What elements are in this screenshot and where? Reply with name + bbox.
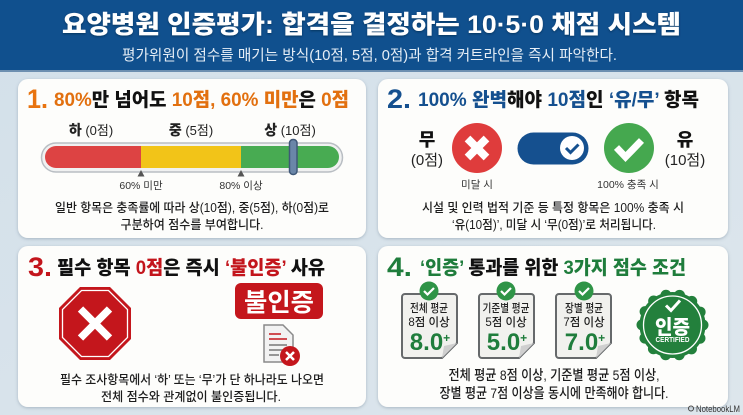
panel 4 heading: 4. — [387, 252, 412, 282]
icon: green check circle — [604, 123, 654, 173]
card: overall average: 8점 이상 — [408, 316, 450, 329]
subtitle: 평가위원이 점수를 매기는 방식(10점, 5점, 0점)과 합격 커트라인을 즉시 파악한다. — [122, 47, 617, 64]
header banner — [0, 0, 743, 72]
panel 3 heading — [28, 252, 325, 282]
certified seal — [640, 292, 706, 358]
title: 요양병원 인증평가: 합격을 결정하는 10·5·0 채점 시스템 — [62, 11, 681, 39]
certified seal: CERTIFIED — [656, 337, 690, 344]
label: yes — [665, 130, 705, 169]
card: per-criterion average: 5.0 — [487, 329, 520, 356]
panel 1 description: 구분하여 점수를 부여합니다. — [120, 217, 264, 232]
label: none — [411, 130, 443, 169]
threshold markers: 80% 이상 — [219, 180, 263, 192]
level labels: 하 (0점) — [69, 122, 113, 138]
card: per-chapter average: 7점 이상 — [563, 316, 605, 329]
panel 4: certification conditions — [378, 246, 728, 407]
card: per-chapter average — [556, 282, 611, 358]
icon: toggle switch — [518, 132, 588, 164]
panel 2 description — [422, 201, 684, 232]
toggle captions — [461, 179, 659, 191]
panel 4 heading: ‘인증’ 통과를 위한 3가지 점수 조건 — [420, 257, 686, 279]
panel 1 description: 일반 항목은 충족률에 따라 상(10점), 중(5점), 하(0점)로 — [55, 201, 329, 215]
card: per-criterion average: 기준별 평균 — [482, 302, 530, 315]
badge: non-certified: 불인증 — [244, 289, 314, 317]
score gauge bar — [42, 140, 342, 174]
panel 4 description: 전체 평균 8점 이상, 기준별 평균 5점 이상, — [448, 367, 660, 383]
card: per-chapter average: 장별 평균 — [565, 302, 603, 315]
panel 1 heading: 80%만 넘어도 10점, 60% 미만은 0점 — [54, 89, 349, 111]
panel 1 heading — [27, 84, 349, 114]
certified seal: 인증 — [655, 316, 690, 339]
icon: rejected document — [264, 325, 300, 366]
card: per-criterion average: + — [520, 331, 527, 345]
toggle captions: 100% 충족 시 — [597, 179, 659, 191]
panel 2: pass/fail items — [378, 79, 728, 238]
card: overall average: 전체 평균 — [410, 302, 448, 315]
toggle captions: 미달 시 — [461, 179, 493, 191]
icon: red X circle — [452, 123, 502, 173]
panel 2 description: ‘유(10점)’, 미달 시 ‘무(0점)’로 처리됩니다. — [452, 218, 656, 232]
panel 3 description — [60, 373, 324, 404]
panel 3 heading: 3. — [28, 252, 52, 282]
card: overall average — [402, 282, 457, 358]
panel 3 description: 필수 조사항목에서 ‘하’ 또는 ‘무’가 단 하나라도 나오면 — [60, 373, 324, 387]
panel 2 heading — [387, 84, 699, 114]
card: per-criterion average — [479, 282, 534, 358]
level labels: 상 (10점) — [264, 122, 316, 138]
panel 4 description: 장별 평균 7점 이상을 동시에 만족해야 합니다. — [440, 385, 668, 401]
card: overall average: + — [443, 331, 450, 345]
panel 1 heading: 1. — [27, 84, 48, 114]
card: per-chapter average: + — [598, 331, 605, 345]
panel 4 description — [440, 367, 668, 401]
panel 3 description: 전체 점수와 관계없이 불인증됩니다. — [101, 390, 281, 404]
icon: stop octagon — [59, 287, 131, 360]
level labels — [69, 122, 316, 138]
threshold markers — [119, 170, 263, 192]
label: yes: 유 — [677, 130, 693, 150]
panel 2 heading: 100% 완벽해야 10점인 ‘유/무’ 항목 — [418, 89, 699, 111]
card: overall average: 8.0 — [410, 329, 443, 356]
panel 3 heading: 필수 항목 0점은 즉시 ‘불인증’ 사유 — [57, 257, 325, 279]
threshold markers: 60% 미만 — [119, 180, 163, 192]
level labels: 중 (5점) — [169, 122, 213, 138]
label: none: 무 — [419, 130, 435, 150]
panel 4 heading — [387, 252, 686, 282]
card: per-chapter average: 7.0 — [565, 329, 598, 356]
panel 2 description: 시설 및 인력 법적 기준 등 특정 항목은 100% 충족 시 — [422, 201, 684, 215]
panel 1 description — [55, 201, 329, 232]
label: yes: (10점) — [665, 152, 705, 169]
panel 2 heading: 2. — [387, 84, 411, 114]
panel 3: mandatory items — [18, 246, 366, 407]
panel 1: general scoring — [18, 79, 366, 238]
card: per-criterion average: 5점 이상 — [485, 316, 527, 329]
label: none: (0점) — [411, 152, 443, 169]
badge: non-certified — [235, 283, 323, 319]
